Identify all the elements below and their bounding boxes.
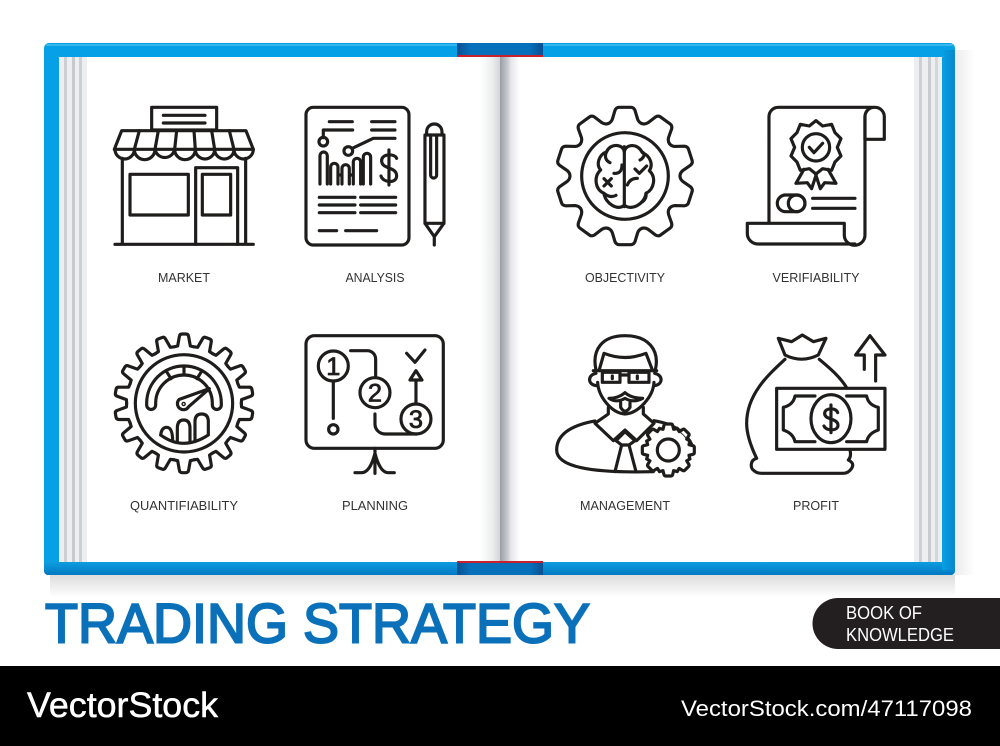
panel: quantifiability bbox=[114, 334, 254, 513]
bottom ribbon bbox=[457, 561, 543, 575]
icon: gear with brain bbox=[554, 107, 696, 245]
label: objectivity: OBJECTIVITY bbox=[585, 270, 665, 285]
panel: profit bbox=[747, 335, 885, 513]
title: TRADING STRATEGY bbox=[45, 592, 590, 654]
footer url: VectorStock.com/47117098 bbox=[681, 696, 972, 721]
icon: report and pen bbox=[306, 107, 444, 245]
icon: money bag with banknote and arrow bbox=[747, 335, 885, 473]
icon: gear with gauge bbox=[114, 334, 254, 473]
icon: presentation board with steps bbox=[306, 336, 443, 473]
book cover bbox=[44, 43, 955, 575]
right page bbox=[500, 57, 942, 562]
label: market: MARKET bbox=[158, 270, 210, 285]
panel: analysis bbox=[306, 107, 444, 285]
footer logo: VectorStock bbox=[27, 686, 219, 725]
badge: book of knowledge bbox=[813, 598, 1000, 649]
panel: verifiability bbox=[747, 107, 884, 285]
icon: storefront bbox=[114, 107, 253, 244]
label: verifiability: VERIFIABILITY bbox=[772, 270, 860, 285]
left page bbox=[59, 57, 501, 562]
icon: presentation board with steps: 2 bbox=[368, 380, 382, 408]
icon: presentation board with steps: 3 bbox=[409, 406, 423, 434]
badge: book of knowledge: BOOK OF bbox=[846, 603, 922, 623]
label: quantifiability: QUANTIFIABILITY bbox=[130, 498, 238, 513]
panel: management bbox=[557, 336, 694, 513]
label: analysis: ANALYSIS bbox=[346, 270, 405, 285]
book bbox=[44, 43, 975, 597]
panel: market bbox=[114, 107, 253, 285]
panel: planning bbox=[306, 336, 443, 513]
label: profit: PROFIT bbox=[793, 498, 839, 513]
label: planning: PLANNING bbox=[342, 498, 408, 513]
footer bar bbox=[0, 666, 1000, 746]
icon: certificate scroll bbox=[747, 107, 884, 245]
top ribbon bbox=[457, 43, 543, 57]
panel: objectivity bbox=[554, 107, 696, 285]
icon: presentation board with steps: 1 bbox=[326, 353, 340, 381]
book shadow bbox=[50, 50, 975, 597]
label: management: MANAGEMENT bbox=[580, 498, 670, 513]
icon: manager with gear bbox=[557, 336, 694, 476]
badge: book of knowledge: KNOWLEDGE bbox=[846, 625, 954, 645]
